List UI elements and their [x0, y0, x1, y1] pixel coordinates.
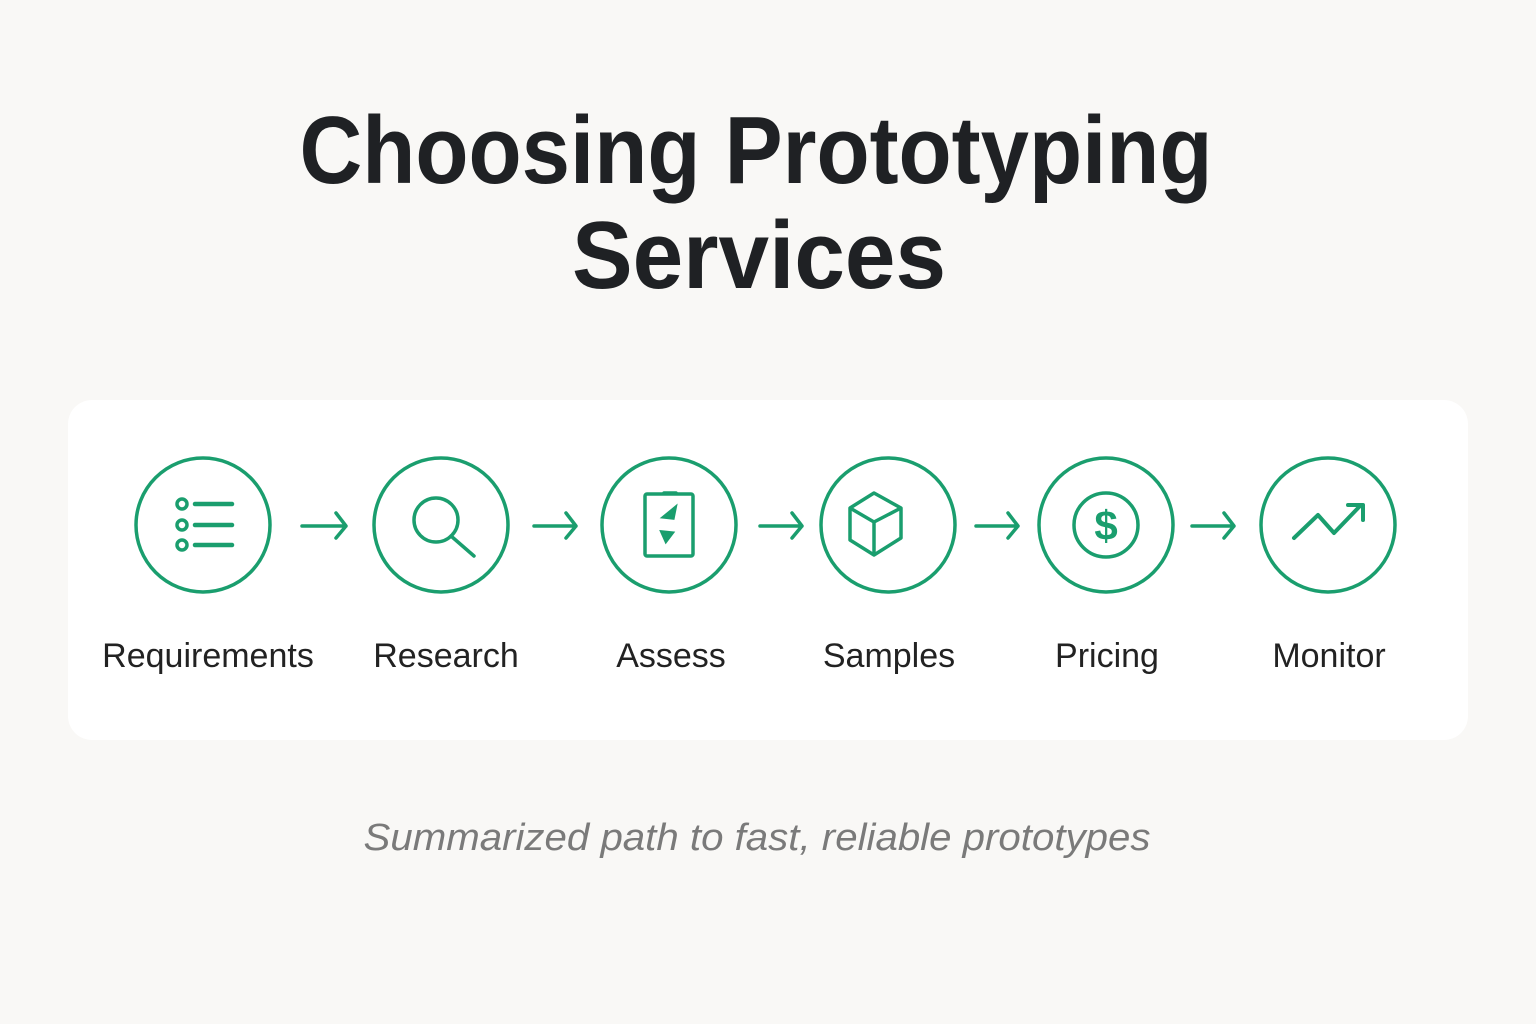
subtitle: Summarized path to fast, reliable prototypes: [364, 817, 1150, 859]
step 2: research: [374, 458, 508, 592]
arrow 2: [534, 513, 576, 538]
step labels: [102, 637, 1386, 675]
step 6: monitor: [1261, 458, 1395, 592]
title: [300, 97, 1212, 309]
title: Choosing Prototyping: [300, 97, 1212, 204]
step labels: Samples: [823, 637, 955, 675]
step labels: Requirements: [102, 637, 314, 675]
step labels: Monitor: [1272, 637, 1386, 675]
step labels: Assess: [616, 637, 726, 675]
arrow 3: [760, 513, 802, 538]
step 1: requirements: [136, 458, 270, 592]
panel: process steps: [68, 400, 1468, 740]
step 5: pricing: [1039, 458, 1173, 592]
step labels: Pricing: [1055, 637, 1159, 675]
arrow 1: [302, 513, 346, 538]
title: Services: [572, 202, 946, 309]
step 5: pricing: $: [1094, 502, 1118, 549]
step 4: samples: [821, 458, 955, 592]
step 3: assess: [602, 458, 736, 592]
step labels: Research: [373, 637, 519, 675]
arrow 4: [976, 513, 1018, 538]
arrow 5: [1192, 513, 1234, 538]
